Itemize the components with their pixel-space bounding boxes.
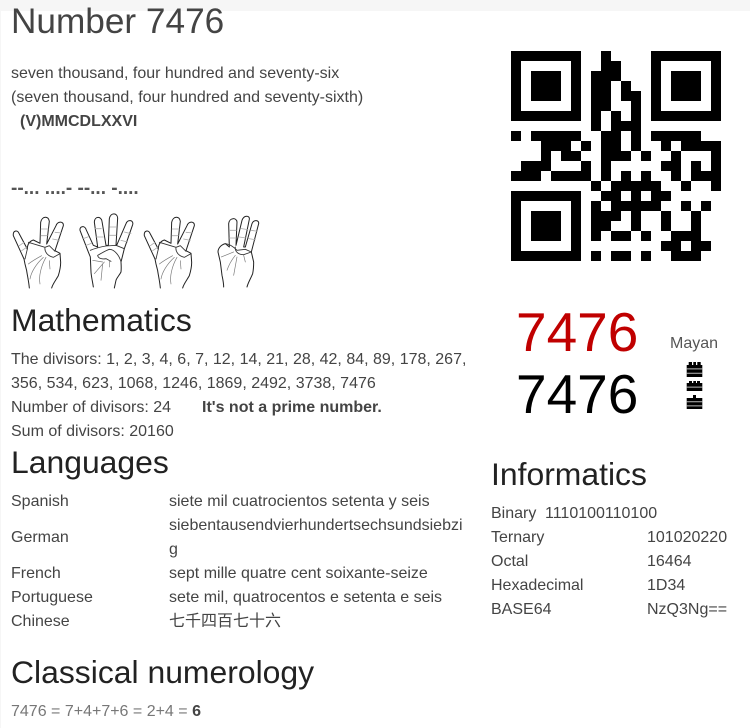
text block: divisors: It's not a prime number. bbox=[202, 399, 382, 416]
table: number in other bases: NzQ3Ng== bbox=[647, 601, 727, 618]
heading: Classical numerology: Classical numerology bbox=[11, 654, 314, 690]
label: Mayan: Mayan bbox=[670, 335, 718, 352]
table: number in other languages: German bbox=[11, 529, 69, 546]
text block: divisors: Sum of divisors: 20160 bbox=[11, 423, 174, 440]
morse code: --... ....- --... -.... bbox=[11, 178, 139, 199]
table: number in other bases: 1D34 bbox=[647, 577, 685, 594]
heading: Languages: Languages bbox=[11, 444, 169, 480]
table: number in other bases: Binary bbox=[491, 505, 536, 522]
table: number in other bases: 101020220 bbox=[647, 529, 727, 546]
text block: number in words: (V)MMCDLXXVI bbox=[20, 113, 137, 130]
text block: divisors: The divisors: 1, 2, 3, 4, 6, 7, 12, 14, 21, 28, 42, 84, 89, 178, 267, bbox=[11, 351, 466, 368]
hand sign: seven again bbox=[144, 217, 194, 288]
table: number in other languages: Portuguese bbox=[11, 589, 93, 606]
hand sign: four bbox=[80, 214, 133, 288]
big number in black: 7476 bbox=[516, 363, 638, 425]
table: number in other bases: 1110100110100 bbox=[545, 505, 657, 522]
text block: divisors: Number of divisors: 24 bbox=[11, 399, 171, 416]
table: number in other bases bbox=[491, 505, 727, 618]
hand sign: seven bbox=[13, 217, 63, 288]
table: number in other bases: Octal bbox=[491, 553, 528, 570]
numerology formula: 7476 = 7+4+7+6 = 2+4 = 6 bbox=[11, 703, 201, 720]
icon: Mayan numeral bbox=[686, 362, 702, 409]
heading: Informatics: Informatics bbox=[491, 456, 647, 492]
text block: divisors bbox=[11, 351, 466, 440]
table: number in other bases: Ternary bbox=[491, 529, 544, 546]
table: number in other languages: g bbox=[169, 541, 178, 558]
text block: divisors: 356, 534, 623, 1068, 1246, 1869, 2492, 3738, 7476 bbox=[11, 375, 376, 392]
text block: number in words: seven thousand, four hundred and seventy-six bbox=[11, 65, 339, 82]
table: number in other bases: Hexadecimal bbox=[491, 577, 583, 594]
QR code bbox=[511, 51, 721, 261]
table: number in other languages: sept mille quatre cent soixante-seize bbox=[169, 565, 428, 582]
table: number in other languages: Chinese bbox=[11, 613, 70, 630]
table: number in other languages: French bbox=[11, 565, 61, 582]
table: number in other languages: siete mil cuatrocientos setenta y seis bbox=[169, 493, 430, 510]
icon: sign language hands bbox=[12, 213, 260, 288]
table: number in other languages: Spanish bbox=[11, 493, 69, 510]
text block: number in words: (seven thousand, four hundred and seventy-sixth) bbox=[11, 89, 363, 106]
big number in red: 7476 bbox=[516, 301, 638, 363]
table: number in other bases: 16464 bbox=[647, 553, 692, 570]
heading: Mathematics: Mathematics bbox=[11, 302, 192, 338]
table: number in other bases: BASE64 bbox=[491, 601, 551, 618]
hand sign: six bbox=[218, 216, 259, 287]
table: number in other languages bbox=[11, 493, 463, 630]
table: number in other languages: siebentausendvierhundertsechsundsiebzi bbox=[169, 517, 463, 534]
title: Number 7476 bbox=[11, 2, 224, 41]
table: number in other languages: 七千四百七十六 bbox=[169, 613, 281, 630]
text block: number in words bbox=[11, 65, 363, 130]
table: number in other languages: sete mil, quatrocentos e setenta e seis bbox=[169, 589, 442, 606]
